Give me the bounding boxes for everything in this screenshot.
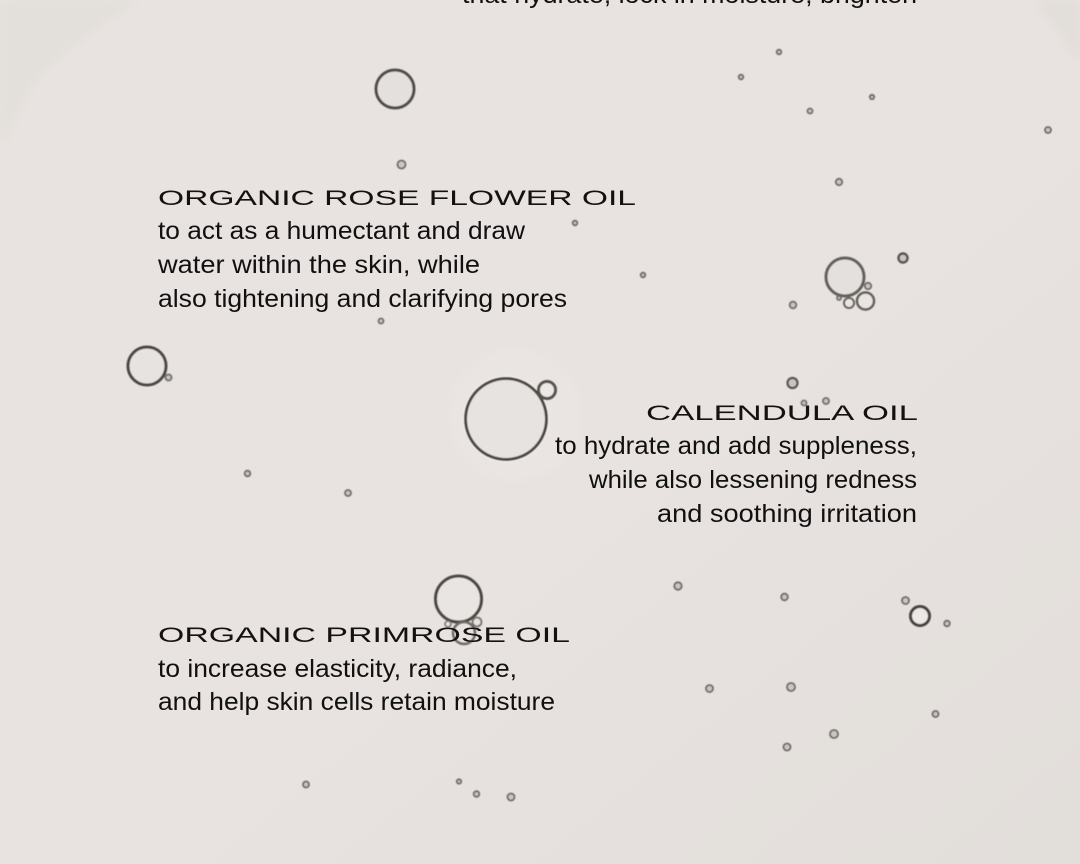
description: calendula oil: while also lessening redness bbox=[588, 466, 917, 494]
description: primrose oil bbox=[158, 655, 555, 716]
bubble: left bbox=[128, 347, 172, 385]
description: rose flower oil bbox=[157, 217, 567, 313]
description: rose flower oil: to act as a humectant and draw bbox=[158, 217, 526, 245]
description: primrose oil: to increase elasticity, radiance, bbox=[158, 655, 517, 683]
bubble: top bbox=[376, 70, 414, 108]
description: rose flower oil: also tightening and clarifying pores bbox=[158, 285, 567, 313]
description: calendula oil bbox=[555, 432, 917, 528]
description: primrose oil: and help skin cells retain moisture bbox=[158, 688, 555, 716]
heading: calendula oil: CALENDULA OIL bbox=[646, 402, 918, 425]
bubble cluster: right bbox=[826, 258, 874, 310]
text block: organic primrose oil bbox=[158, 624, 570, 716]
heading: organic primrose oil: ORGANIC PRIMROSE OIL bbox=[158, 624, 570, 647]
large bubble cluster: centre bbox=[464, 376, 556, 462]
description: rose flower oil: water within the skin, while bbox=[157, 251, 480, 279]
text block: organic rose flower oil bbox=[157, 187, 636, 313]
small scattered bubbles bbox=[245, 50, 1051, 800]
text block: calendula oil bbox=[555, 402, 918, 528]
description: calendula oil: to hydrate and add suppleness, bbox=[555, 432, 917, 460]
heading: organic rose flower oil: ORGANIC ROSE FLOWER OIL bbox=[158, 187, 636, 210]
bubble: lower right bbox=[902, 597, 950, 626]
description: calendula oil: and soothing irritation bbox=[657, 500, 917, 528]
bubble cluster: lower bbox=[436, 576, 482, 644]
